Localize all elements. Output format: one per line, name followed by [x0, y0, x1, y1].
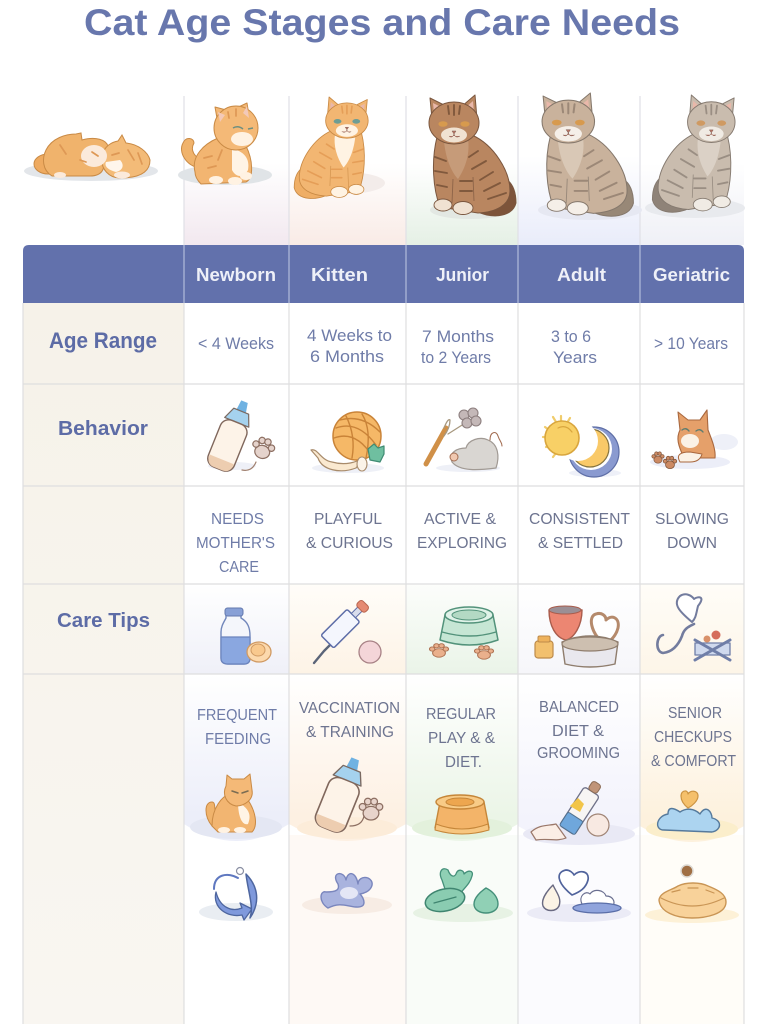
care tip captions: & COMFORT [651, 753, 736, 770]
table body background and grid [23, 303, 744, 1024]
care tip captions: CHECKUPS [654, 729, 732, 746]
age range values [198, 327, 728, 367]
behavior captions: MOTHER'S [196, 535, 275, 552]
behavior captions: CARE [219, 559, 259, 576]
cat illustration: kitten sitting, newborn column [178, 103, 272, 185]
care tip captions: BALANCED [539, 699, 619, 716]
illustration: green pills and leaf [413, 869, 513, 922]
icon: small resting cat with toys [650, 410, 738, 469]
column tint backgrounds above the table [184, 96, 744, 245]
illustration: circular arrows [199, 868, 273, 921]
care tip captions: PLAY & & [428, 730, 495, 747]
behavior captions: DOWN [667, 535, 717, 552]
behavior captions [196, 511, 729, 576]
title: Cat Age Stages and Care Needs [84, 2, 680, 43]
care tip captions: REGULAR [426, 706, 496, 723]
table header band: Newborn [196, 265, 276, 285]
age range values: 7 Months [422, 328, 494, 346]
age range values: 3 to 6 [551, 328, 591, 346]
behavior captions: ACTIVE & [424, 511, 496, 528]
age range values: > 10 Years [654, 335, 728, 353]
care tip captions: & TRAINING [306, 724, 394, 741]
age range values: to 2 Years [421, 349, 491, 367]
table header band: Kitten [311, 265, 368, 285]
illustration: grooming tube [531, 778, 609, 840]
illustration: small kitten [206, 774, 255, 833]
behavior captions: EXPLORING [417, 535, 507, 552]
behavior captions: PLAYFUL [314, 511, 382, 528]
icon: milk bottle and paw [205, 397, 277, 474]
illustration: bottle and paw [312, 753, 383, 835]
row label: Behavior: Behavior [58, 418, 148, 440]
cat illustration: junior [429, 95, 516, 219]
behavior captions: & SETTLED [538, 535, 623, 552]
illustration: cushion bed with ball [645, 865, 739, 923]
table header band: Adult [557, 265, 606, 285]
row label: Care Tips: Care Tips [57, 610, 150, 632]
row label: Age Range: Age Range [49, 328, 157, 353]
table header band [23, 245, 744, 303]
age range values: Years [553, 349, 597, 367]
icon: green bowl and paws [429, 607, 498, 659]
age range values: 4 Weeks to [307, 327, 392, 345]
cat illustration: kitten [294, 97, 385, 198]
care tip captions: VACCINATION [299, 700, 400, 717]
table header band: Geriatric [653, 265, 730, 285]
behavior captions: & CURIOUS [306, 535, 393, 552]
illustration: purple paw [302, 874, 392, 914]
behavior captions: NEEDS [211, 511, 264, 528]
cat illustration: newborn kittens sleeping [24, 133, 158, 181]
care tip captions: SENIOR [668, 705, 722, 722]
illustration: cloud cushion and heart [658, 791, 720, 832]
age range values: 6 Months [310, 348, 384, 366]
care tip captions: DIET. [445, 754, 482, 771]
icon: stethoscope and bandage box [657, 594, 730, 660]
behavior captions: SLOWING [655, 511, 729, 528]
care tip captions: FEEDING [205, 731, 271, 748]
care tip captions: DIET & [552, 723, 604, 740]
icon: sun and moon [543, 416, 621, 477]
icon: yarn ball [311, 412, 384, 473]
icon: wand toy and mouse [426, 408, 502, 472]
icon: milk jug and egg [221, 608, 271, 664]
table header band: Junior [436, 265, 489, 285]
age range values: < 4 Weeks [198, 335, 274, 353]
icon: cup, jar, food bowl and heart [535, 606, 618, 667]
icon: syringe and ball [314, 597, 381, 663]
care tip captions [197, 699, 736, 771]
care tip captions: GROOMING [537, 745, 620, 762]
cat illustration: adult [538, 93, 642, 220]
care tip captions: FREQUENT [197, 707, 277, 724]
cat illustration: geriatric [645, 95, 745, 218]
behavior captions: CONSISTENT [529, 511, 630, 528]
illustration: heart, drop and cloud [527, 870, 631, 922]
illustration: orange bowl [435, 795, 489, 834]
